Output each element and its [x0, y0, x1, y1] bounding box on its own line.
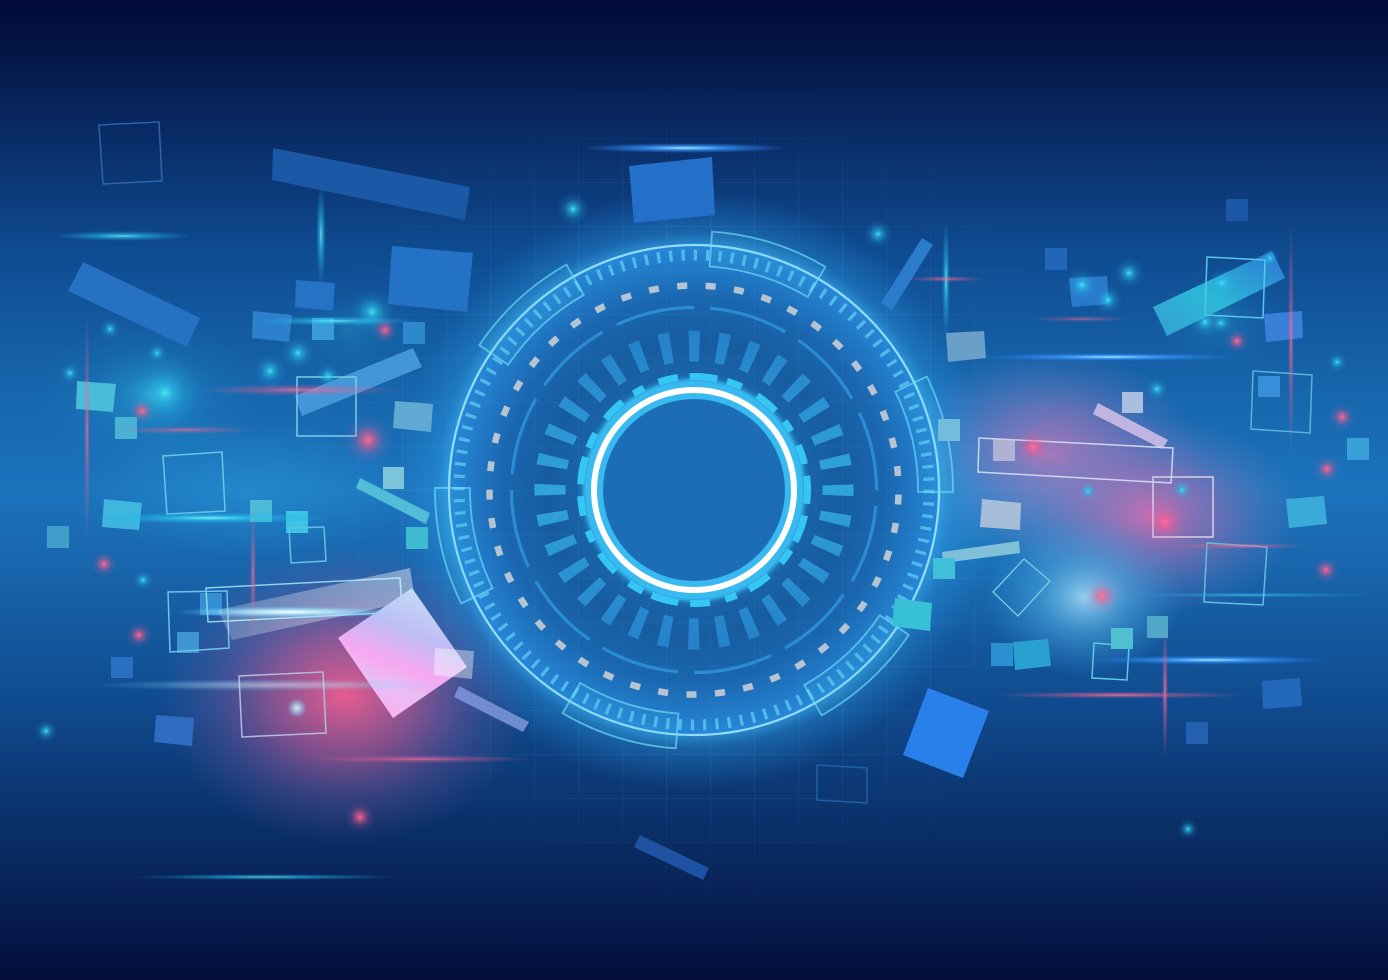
tick ring	[459, 255, 929, 725]
glowing dots: pink	[91, 317, 1355, 832]
inner outer thin ring	[584, 380, 804, 600]
HUD ring glow	[394, 190, 994, 790]
ring body	[449, 245, 939, 735]
inner ring glow	[591, 387, 797, 593]
shapes: left cluster	[47, 122, 529, 746]
inner white ring	[594, 390, 794, 590]
icon: pink square	[338, 588, 467, 718]
shapes: right cluster	[892, 199, 1369, 778]
inner core disc	[586, 382, 802, 598]
inner segmented ring	[575, 371, 813, 609]
glowing dot: white	[287, 698, 307, 718]
outer ring line	[449, 245, 939, 735]
segmented arc ring	[496, 292, 892, 688]
shapes: top and bottom centre	[629, 157, 933, 880]
grid over ring	[449, 245, 939, 735]
inner cyan band	[594, 390, 794, 590]
large colour glows	[40, 270, 1300, 845]
grid lines	[349, 104, 1018, 876]
HUD circle	[405, 232, 983, 748]
radial bar ring	[545, 341, 843, 639]
light streaks	[52, 143, 1380, 880]
glowing dots: cyan	[35, 193, 1347, 839]
dashed grey dot ring	[485, 281, 903, 699]
frames on the ring	[405, 232, 983, 748]
